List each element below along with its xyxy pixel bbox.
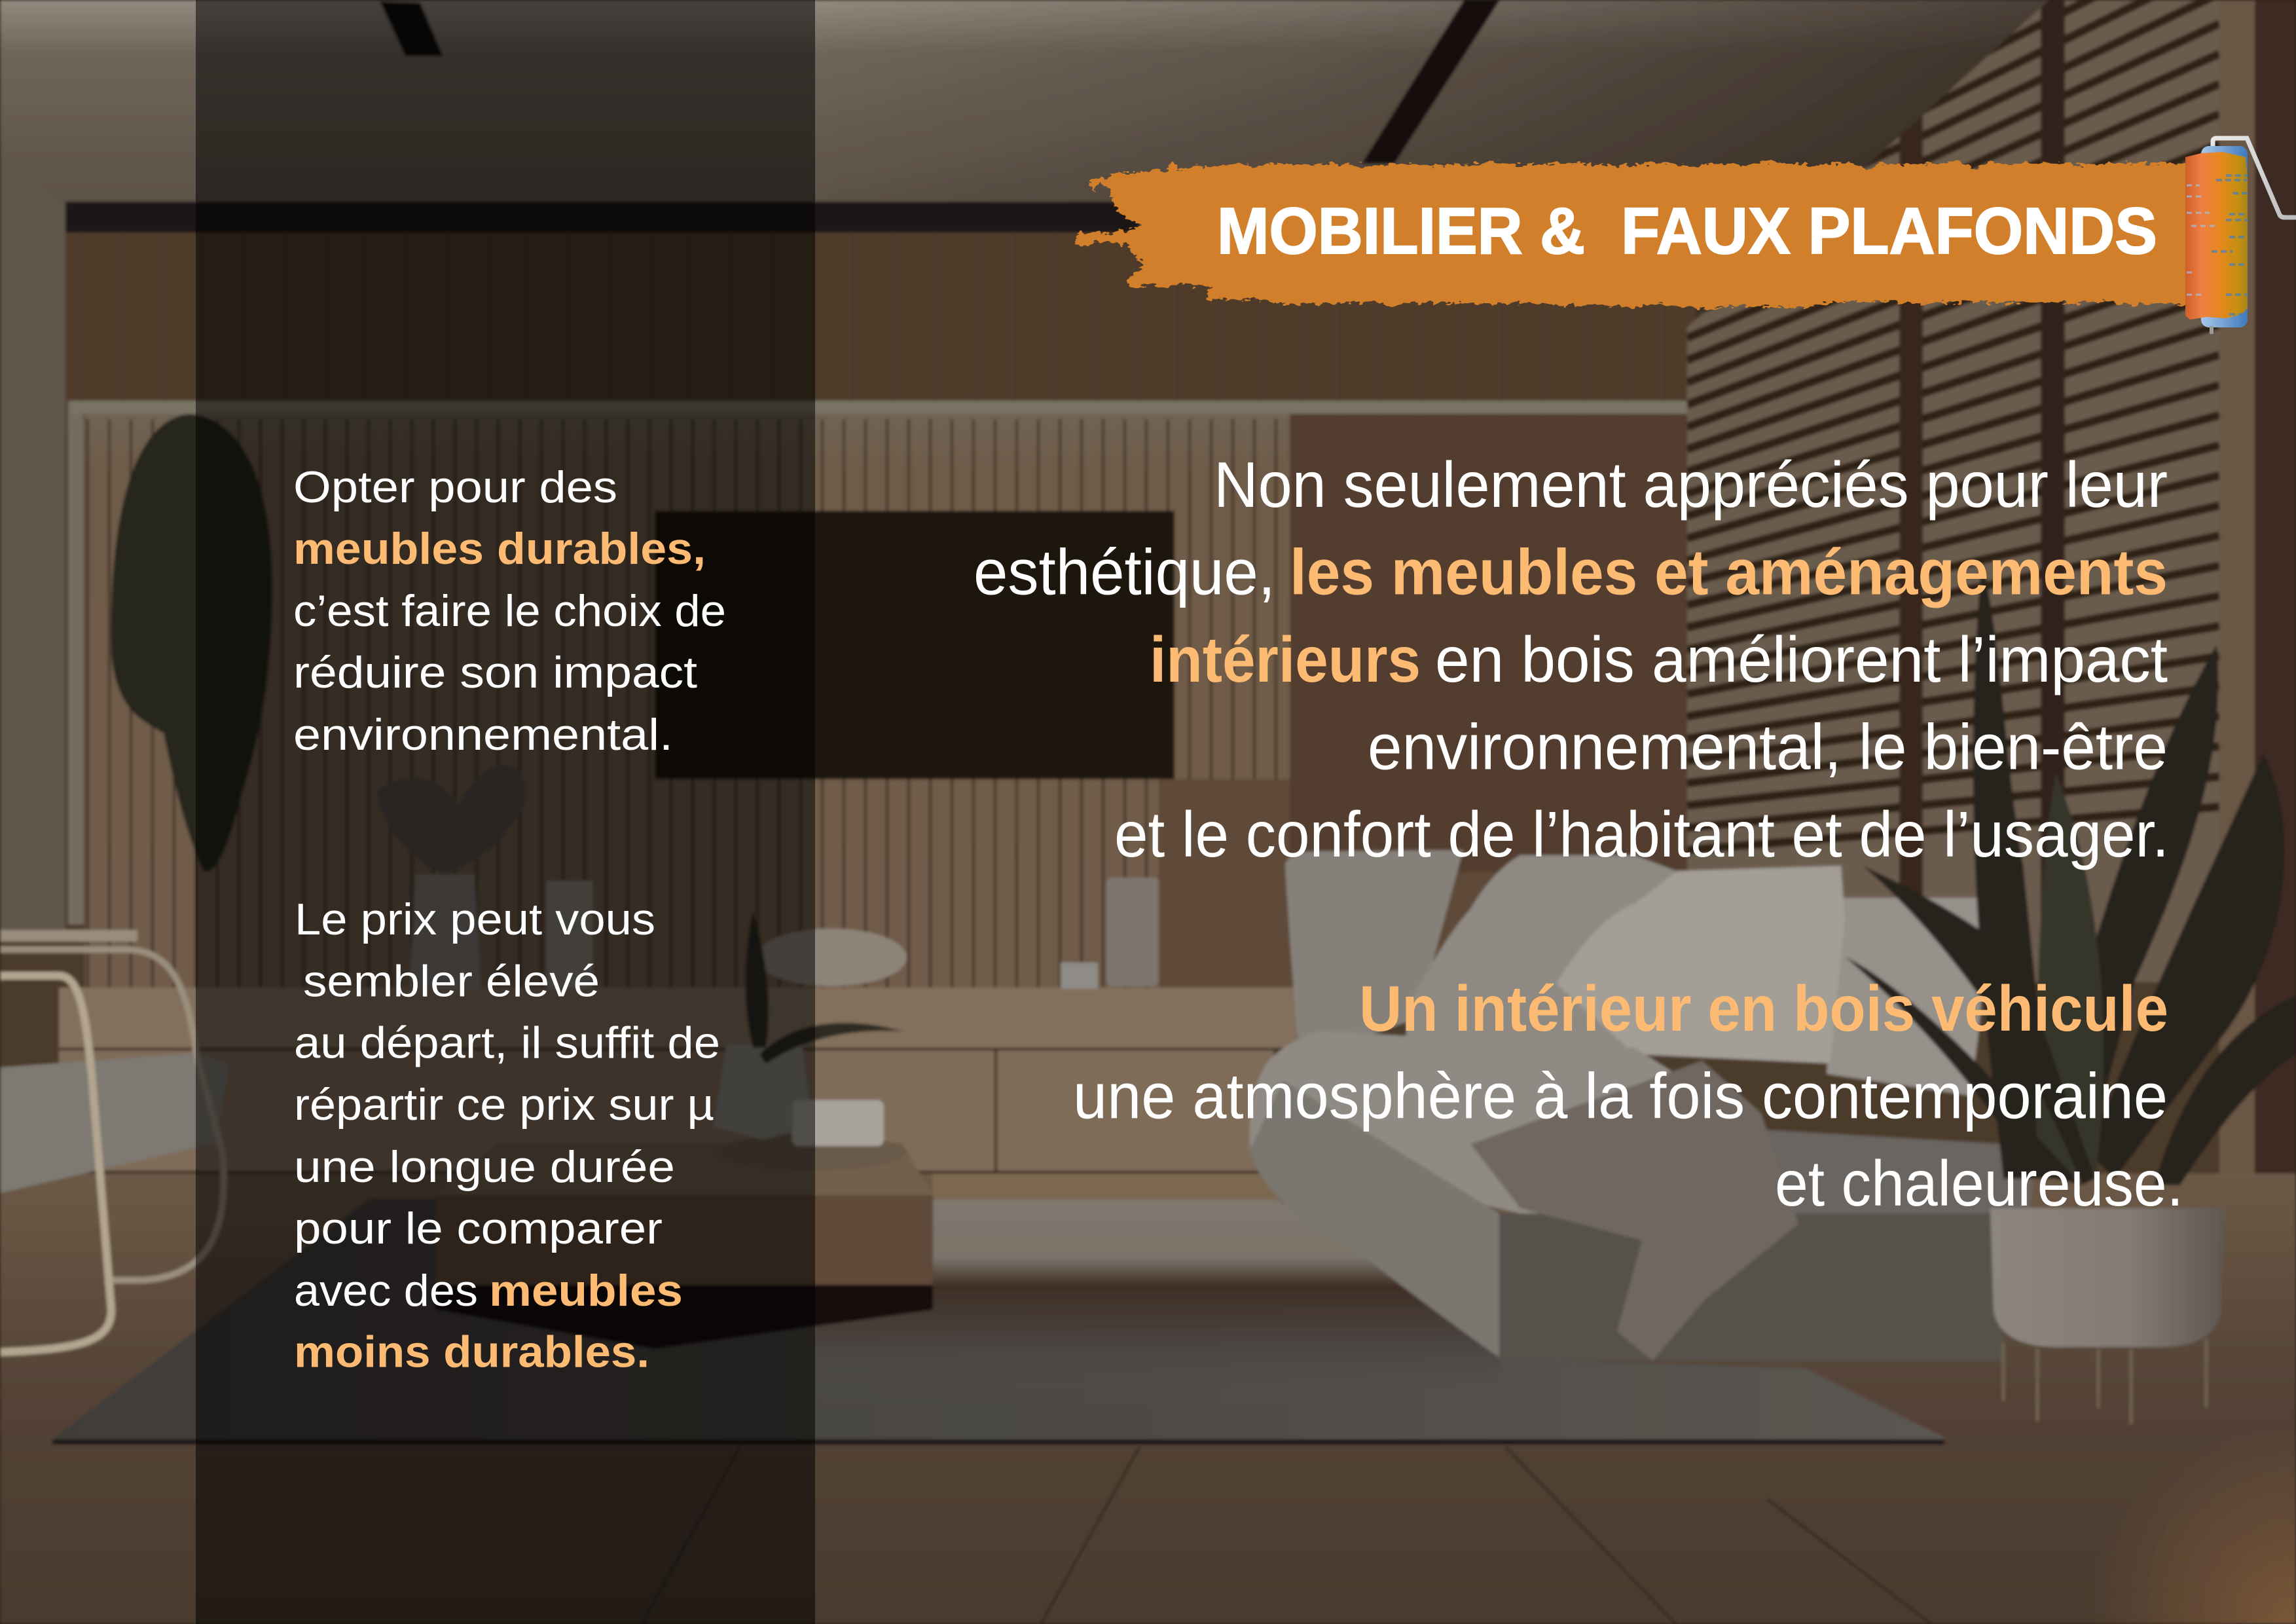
- text block: price over time: au départ, il suffit de: [294, 1018, 720, 1067]
- lounge chair: [0, 930, 229, 1352]
- ceiling rail: [1362, 0, 1500, 164]
- text block: main paragraph: Non seulement appréciés pour leur: [1214, 449, 2168, 521]
- title banner: paint stroke: [1074, 162, 2189, 308]
- back cushion left: [1285, 850, 1463, 1061]
- text block: price over time: répartir ce prix sur µ: [294, 1080, 714, 1130]
- sofa front: [1499, 1213, 2003, 1361]
- right cushion: [1827, 898, 1982, 1096]
- ceiling: [0, 0, 2296, 432]
- ribbed wall: [85, 401, 1290, 990]
- lit floor patch: [932, 1173, 1279, 1201]
- icon: paint roller: [2185, 138, 2296, 334]
- left wall glow column: [68, 401, 84, 925]
- low cabinet: [59, 987, 1297, 1175]
- upper wood panel: [65, 232, 1696, 401]
- text block: main paragraph: les meubles et aménagements: [1290, 536, 2168, 608]
- text block: durable furniture: Opter pour des: [293, 462, 617, 512]
- text block: main paragraph: environnemental, le bien-être: [1368, 711, 2168, 783]
- text block: price over time: Le prix peut vous: [295, 895, 655, 944]
- text block: durable furniture: meubles durables,: [293, 524, 706, 574]
- rug lit and shaded zone: [815, 1200, 1499, 1408]
- text block: atmosphere paragraph: une atmosphère à la fois contemporaine: [1073, 1060, 2168, 1132]
- throw blanket: [1470, 1061, 1798, 1361]
- wood wall right of ribs: [1159, 779, 1702, 995]
- text block: atmosphere paragraph: Un intérieur en bois véhicule: [1359, 972, 2168, 1044]
- text block: main paragraph: intérieurs: [1150, 623, 1421, 695]
- title text: [1217, 194, 2157, 268]
- text block: durable furniture: c’est faire le choix de: [293, 586, 726, 636]
- candle: [1061, 963, 1098, 989]
- rug shadow edge: [52, 1439, 1944, 1445]
- white plant pot: [1990, 1208, 2225, 1424]
- left wall: [0, 157, 65, 930]
- back cushion second: [1406, 855, 1676, 1048]
- light strip: [72, 401, 1689, 414]
- front pillow: [1556, 866, 1845, 1063]
- text block: main paragraph: esthétique,: [974, 536, 1275, 608]
- text block: main paragraph: et le confort de l’habitant et de l’usager.: [1114, 798, 2169, 870]
- text block: price over time: meubles: [489, 1266, 683, 1316]
- TV screen: [655, 511, 1175, 779]
- text block: price over time: une longue durée: [294, 1142, 675, 1192]
- floor: [0, 1173, 2296, 1624]
- ceiling spot track: [380, 1, 443, 56]
- text block: price over time: avec des: [294, 1266, 478, 1316]
- right wall posts: [2219, 0, 2296, 1375]
- sofa arm front: [1250, 1080, 1499, 1357]
- seat: [1250, 1031, 2033, 1213]
- seat right shade: [1761, 1130, 2036, 1213]
- hanging plant: [111, 414, 272, 872]
- glass vase: [1106, 877, 1159, 986]
- text block: durable furniture: [293, 462, 726, 760]
- coffee table: [435, 1143, 933, 1349]
- slatted wall: [1687, 0, 2219, 982]
- rug: [52, 1198, 1944, 1444]
- text block: atmosphere paragraph: [1073, 972, 2183, 1219]
- text block: price over time: moins durables.: [294, 1327, 649, 1376]
- text block: price over time: [294, 895, 720, 1376]
- text block: price over time: pour le comparer: [294, 1204, 663, 1253]
- snake plant: [1845, 558, 2296, 1185]
- text block: main paragraph: [974, 449, 2169, 870]
- text block: main paragraph: en bois améliorent l’impact: [1435, 623, 2168, 695]
- title text: FAUX PLAFONDS: [1621, 194, 2157, 268]
- tray and dishes: [714, 910, 907, 1171]
- text block: price over time: sembler élevé: [303, 956, 600, 1006]
- title text: MOBILIER &: [1217, 194, 1585, 268]
- sofa: [1250, 850, 2036, 1361]
- pillow on cabinet: [756, 929, 907, 986]
- dark cove strip: [65, 202, 1139, 232]
- text block: durable furniture: environnemental.: [293, 710, 673, 760]
- flower vase on shelf: [376, 765, 526, 989]
- text block: durable furniture: réduire son impact: [293, 648, 697, 697]
- panel: dark column: [196, 0, 815, 1624]
- books: [547, 881, 592, 989]
- text block: atmosphere paragraph: et chaleureuse.: [1775, 1147, 2183, 1219]
